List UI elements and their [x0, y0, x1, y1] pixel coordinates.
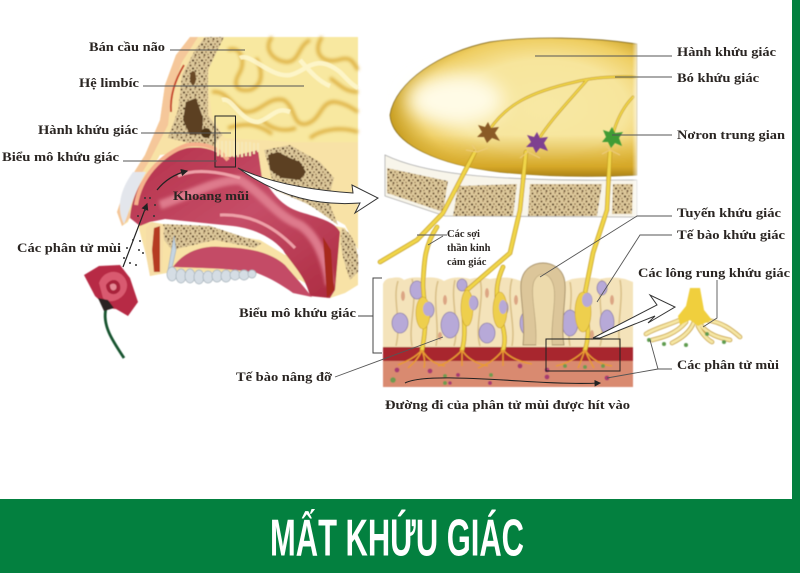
frontal bone — [168, 37, 224, 148]
label: Các lông rung khứu giác — [638, 266, 791, 280]
label: Tuyến khứu giác — [677, 206, 782, 220]
frontal sinus small — [190, 71, 196, 85]
panel: head cross-section — [117, 37, 358, 298]
nuclei — [392, 279, 614, 343]
lip red — [152, 226, 160, 272]
fade bulb right edge — [632, 30, 640, 220]
label: Bó khứu giác — [677, 71, 760, 85]
label: Nơron trung gian — [677, 128, 785, 142]
cilia shadow — [646, 318, 740, 343]
title banner — [0, 499, 800, 573]
cell specks — [401, 288, 614, 340]
odor molecules near nose — [123, 197, 156, 266]
leader lines — [123, 50, 717, 378]
label: Hành khứu giác — [38, 123, 139, 137]
nerve endings — [466, 145, 620, 158]
label: sensory fibres: cảm giác — [447, 257, 487, 268]
cell nuclei in neurons — [423, 293, 592, 316]
sphenoid bone — [264, 145, 338, 225]
pink layer — [383, 361, 633, 387]
stars: interneurons — [477, 122, 623, 153]
throat stripe — [323, 237, 334, 298]
arrow: inhaled air — [123, 171, 187, 267]
nostril cartilage — [120, 172, 146, 224]
cilia body — [678, 288, 712, 326]
nasal cavity — [130, 147, 340, 298]
odor molecules — [395, 364, 609, 385]
skin outer stripe — [117, 37, 198, 226]
cilia fill — [646, 318, 740, 343]
sphenoid sinus — [268, 152, 306, 180]
ethmoid sinus — [201, 128, 211, 138]
spine bone — [341, 228, 358, 280]
blood vessel — [171, 65, 184, 112]
nerve fill — [380, 77, 637, 350]
bone layer — [385, 155, 637, 217]
olfactory comb — [218, 140, 258, 157]
icon: rose — [84, 265, 138, 358]
skin lower — [138, 222, 358, 298]
bulb body — [390, 38, 637, 176]
label: sensory fibres: Các sợi — [447, 229, 480, 240]
zoom box — [215, 116, 236, 167]
green molecules — [390, 364, 605, 385]
cilia detail — [646, 288, 740, 347]
title: MẤT KHỨU GIÁC — [270, 508, 524, 568]
skin — [117, 37, 358, 250]
cilia roots — [398, 350, 612, 368]
neuron brown — [477, 122, 500, 143]
arrow: cilia zoom — [593, 295, 675, 338]
panel: olfactory bulb — [380, 38, 637, 387]
labels — [2, 40, 791, 412]
bulb highlight — [407, 74, 503, 126]
olfactory nerves — [380, 77, 637, 350]
label: Biểu mô khứu giác — [239, 306, 357, 320]
nerve shadow — [380, 77, 637, 350]
label: Hệ limbíc — [79, 76, 140, 90]
label: Biểu mô khứu giác — [2, 150, 120, 164]
detail box — [546, 339, 620, 371]
teeth — [167, 236, 256, 284]
epithelium — [383, 263, 633, 387]
red layer — [383, 347, 633, 361]
frontal sinus — [183, 98, 203, 135]
label: Các phân tử mùi — [677, 358, 780, 372]
right green strip — [792, 0, 800, 499]
label: Đường đi của phân tử mùi được hít vào — [385, 398, 630, 412]
label: Tế bào khứu giác — [677, 228, 786, 242]
arrow: zoom to detail — [238, 168, 378, 213]
hard palate bone — [163, 224, 262, 250]
label: Bán cầu não — [89, 40, 165, 54]
neuron purple — [526, 132, 548, 153]
gland — [521, 263, 565, 345]
cell bodies — [416, 290, 591, 332]
label: Hành khứu giác — [677, 45, 777, 59]
label: Tế bào nâng đỡ — [236, 370, 332, 384]
label: sensory fibres: thần kinh — [447, 243, 491, 254]
label: Khoang mũi — [173, 189, 250, 203]
neuron green — [602, 127, 623, 148]
bulb bottom shade — [390, 38, 637, 176]
nasal lining edge — [136, 144, 228, 205]
arrow: inhaled path — [405, 378, 600, 383]
brain — [208, 37, 358, 142]
nasal turbinate highlights — [160, 180, 330, 285]
label: Các phân tử mùi — [17, 241, 122, 255]
lip — [146, 222, 164, 276]
bracket — [358, 278, 382, 353]
mouth — [173, 247, 312, 297]
